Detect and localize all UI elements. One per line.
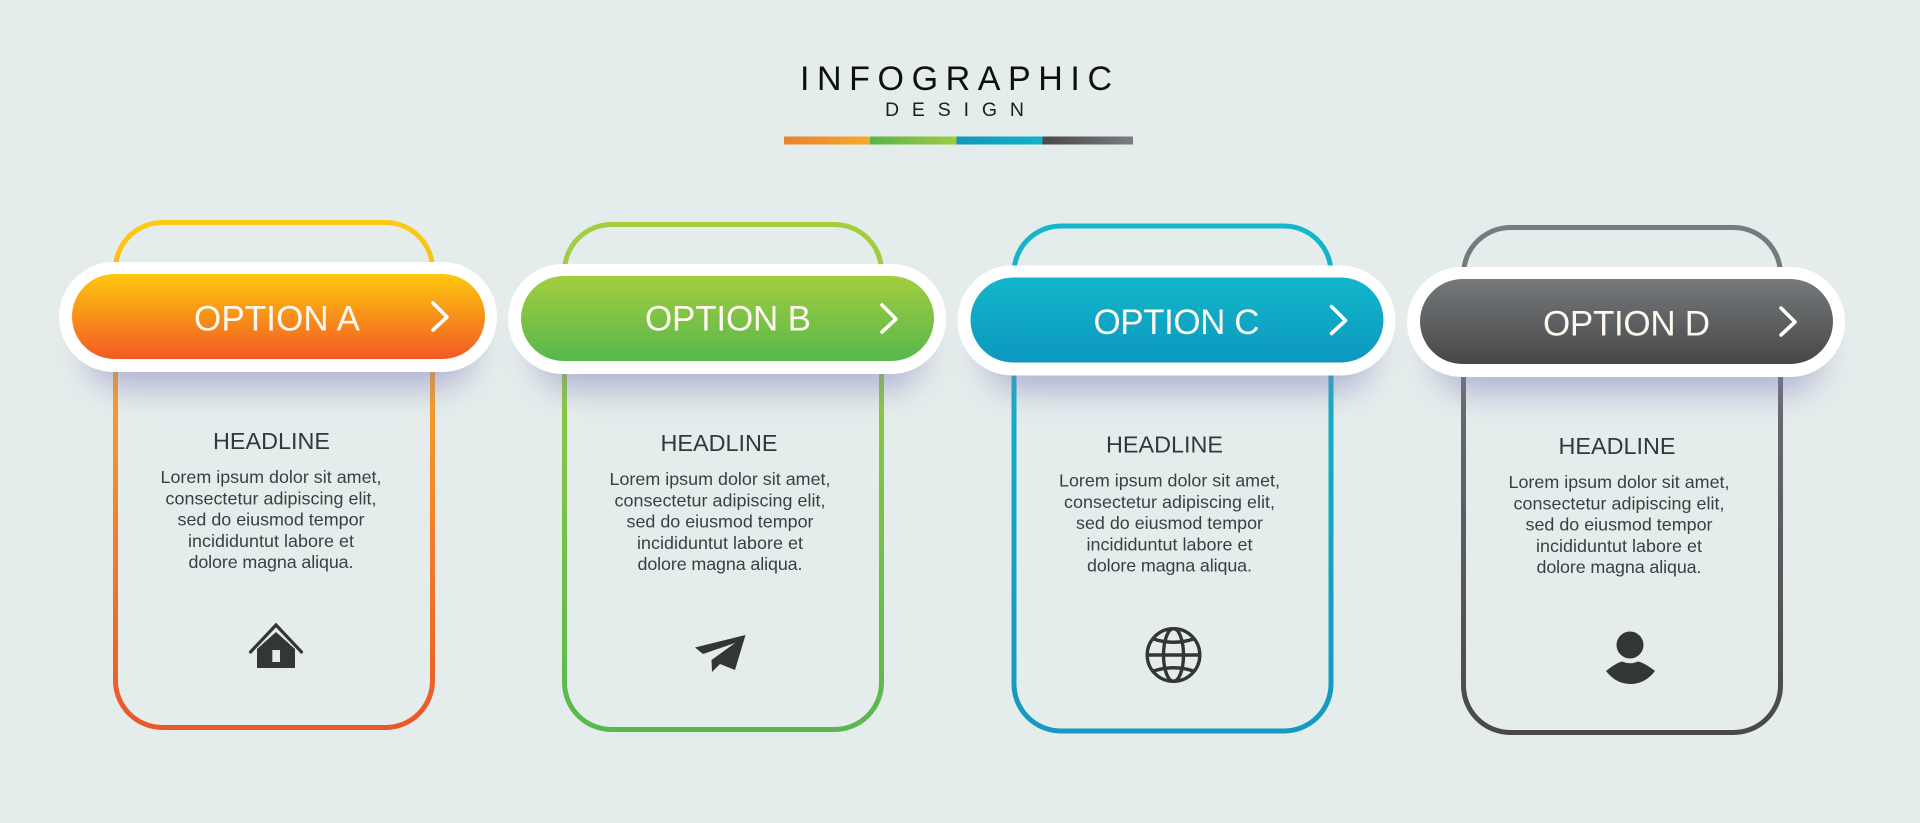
pill C (958, 266, 1396, 376)
title (784, 60, 1133, 144)
pill D: OPTION D (1543, 304, 1710, 344)
pill C: OPTION C (1094, 303, 1260, 342)
text block A: sed do eiusmod tempor (178, 510, 365, 530)
panel: option C (958, 226, 1396, 731)
heading A: HEADLINE (213, 428, 330, 454)
text block C: sed do eiusmod tempor (1076, 513, 1263, 533)
icon: person (1606, 632, 1655, 684)
panel: option D (1407, 228, 1845, 732)
heading B: HEADLINE (660, 430, 778, 456)
card outline B (564, 224, 882, 730)
arrow B (882, 305, 896, 332)
pill shadow D (1433, 311, 1823, 393)
panel: option B (508, 224, 946, 730)
arrow D (1781, 308, 1795, 335)
panel: option A (59, 222, 497, 728)
text block C (1059, 470, 1280, 576)
text block C: dolore magna aliqua. (1087, 556, 1252, 576)
text block A: consectetur adipiscing elit, (166, 488, 376, 508)
heading D: HEADLINE (1558, 433, 1676, 459)
heading C: HEADLINE (1106, 432, 1223, 458)
pill A: OPTION A (194, 300, 361, 338)
subtitle: DESIGN: DESIGN (885, 99, 1024, 121)
text block C: consectetur adipiscing elit, (1064, 492, 1275, 512)
icon: paper plane (695, 635, 746, 672)
icon: globe (1147, 629, 1200, 681)
text block D: dolore magna aliqua. (1536, 557, 1702, 577)
arrow C (1332, 306, 1346, 334)
pill B: OPTION B (645, 300, 811, 338)
text block A: dolore magna aliqua. (188, 552, 354, 572)
pill shadow B (534, 308, 924, 390)
text block D: sed do eiusmod tempor (1526, 515, 1713, 535)
text block A: Lorem ipsum dolor sit amet, (160, 467, 382, 487)
text block B: incididuntut labore et (637, 533, 803, 553)
text block C: incididuntut labore et (1086, 534, 1253, 554)
text block D (1508, 472, 1730, 577)
text block B (610, 469, 830, 574)
arrow A (433, 303, 447, 330)
pill A (59, 262, 497, 372)
text block A (160, 467, 382, 572)
pill D (1407, 267, 1845, 377)
text block D: consectetur adipiscing elit, (1514, 493, 1724, 513)
text block B: dolore magna aliqua. (638, 554, 802, 574)
text block D: Lorem ipsum dolor sit amet, (1508, 472, 1730, 492)
title: INFOGRAPHIC: INFOGRAPHIC (800, 60, 1112, 98)
card outline D (1464, 228, 1780, 732)
colour bar (784, 136, 1133, 144)
text block B: Lorem ipsum dolor sit amet, (610, 469, 830, 489)
text block C: Lorem ipsum dolor sit amet, (1059, 470, 1280, 490)
text block B: consectetur adipiscing elit, (614, 490, 826, 510)
card outline C (1014, 226, 1331, 731)
pill shadow C (984, 310, 1374, 392)
pill shadow A (85, 306, 475, 388)
text block D: incididuntut labore et (1536, 536, 1702, 556)
text block B: sed do eiusmod tempor (626, 512, 814, 532)
pill B (508, 264, 946, 374)
icon: house (250, 625, 302, 668)
card outline A (116, 222, 432, 728)
text block A: incididuntut labore et (188, 531, 354, 551)
